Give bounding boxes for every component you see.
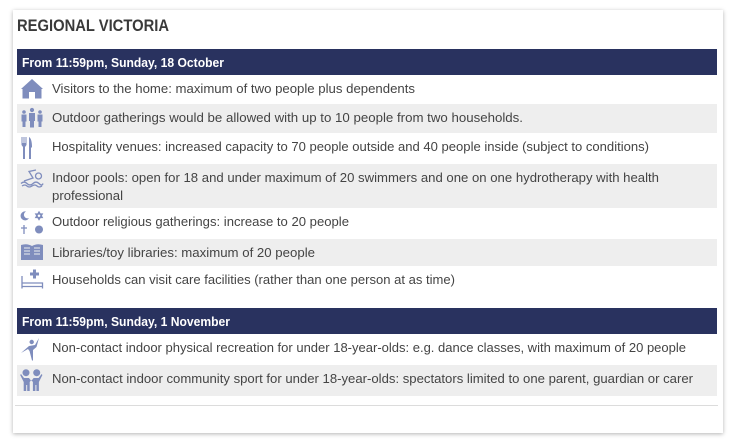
row: physical recreation: Non-contact indoor physical recreation for under 18-year-olds: e.g. dance classes, with maximum of 20 people <box>52 340 686 355</box>
row: libraries <box>17 239 717 266</box>
row: outdoor gatherings <box>17 104 717 133</box>
row: religious gatherings <box>21 211 349 234</box>
icon: dancer <box>21 338 39 360</box>
section header: 18 October: From 11:59pm, Sunday, 18 October <box>22 55 224 70</box>
section header: 18 October <box>17 49 717 75</box>
row: indoor pools <box>17 164 717 208</box>
row: community sport: Non-contact indoor community sport for under 18-year-olds: spectators limited to one parent, guardian or carer <box>52 371 694 386</box>
row: outdoor gatherings: Outdoor gatherings would be allowed with up to 10 people from two households. <box>52 110 523 125</box>
icon: religious symbols <box>21 211 43 234</box>
icon: fork and knife <box>22 137 32 159</box>
row: visitors: Visitors to the home: maximum of two people plus dependents <box>52 81 415 96</box>
icon: two children <box>20 369 42 391</box>
row: visitors <box>21 79 415 98</box>
row: indoor pools: Indoor pools: open for 18 and under maximum of 20 swimmers and one on one hydrotherapy with health <box>52 170 659 185</box>
row: community sport <box>17 365 717 396</box>
icon: house <box>21 79 43 98</box>
row: indoor pools: professional <box>52 188 123 203</box>
section header: 1 November: From 11:59pm, Sunday, 1 November <box>22 314 230 329</box>
row: physical recreation <box>21 338 686 360</box>
icon: three people <box>22 108 42 128</box>
title: REGIONAL VICTORIA <box>17 16 169 35</box>
row: libraries: Libraries/toy libraries: maximum of 20 people <box>52 245 315 260</box>
icon: swimmer <box>21 170 43 187</box>
row: religious gatherings: Outdoor religious gatherings: increase to 20 people <box>52 214 349 229</box>
icon: open book <box>21 244 43 260</box>
section header: 1 November <box>17 308 717 334</box>
row: care facilities: Households can visit care facilities (rather than one person at as time) <box>52 272 455 287</box>
icon: care bed <box>22 270 42 288</box>
row: hospitality <box>22 137 649 159</box>
row: hospitality: Hospitality venues: increased capacity to 70 people outside and 40 people inside (subject to conditions) <box>52 139 649 154</box>
